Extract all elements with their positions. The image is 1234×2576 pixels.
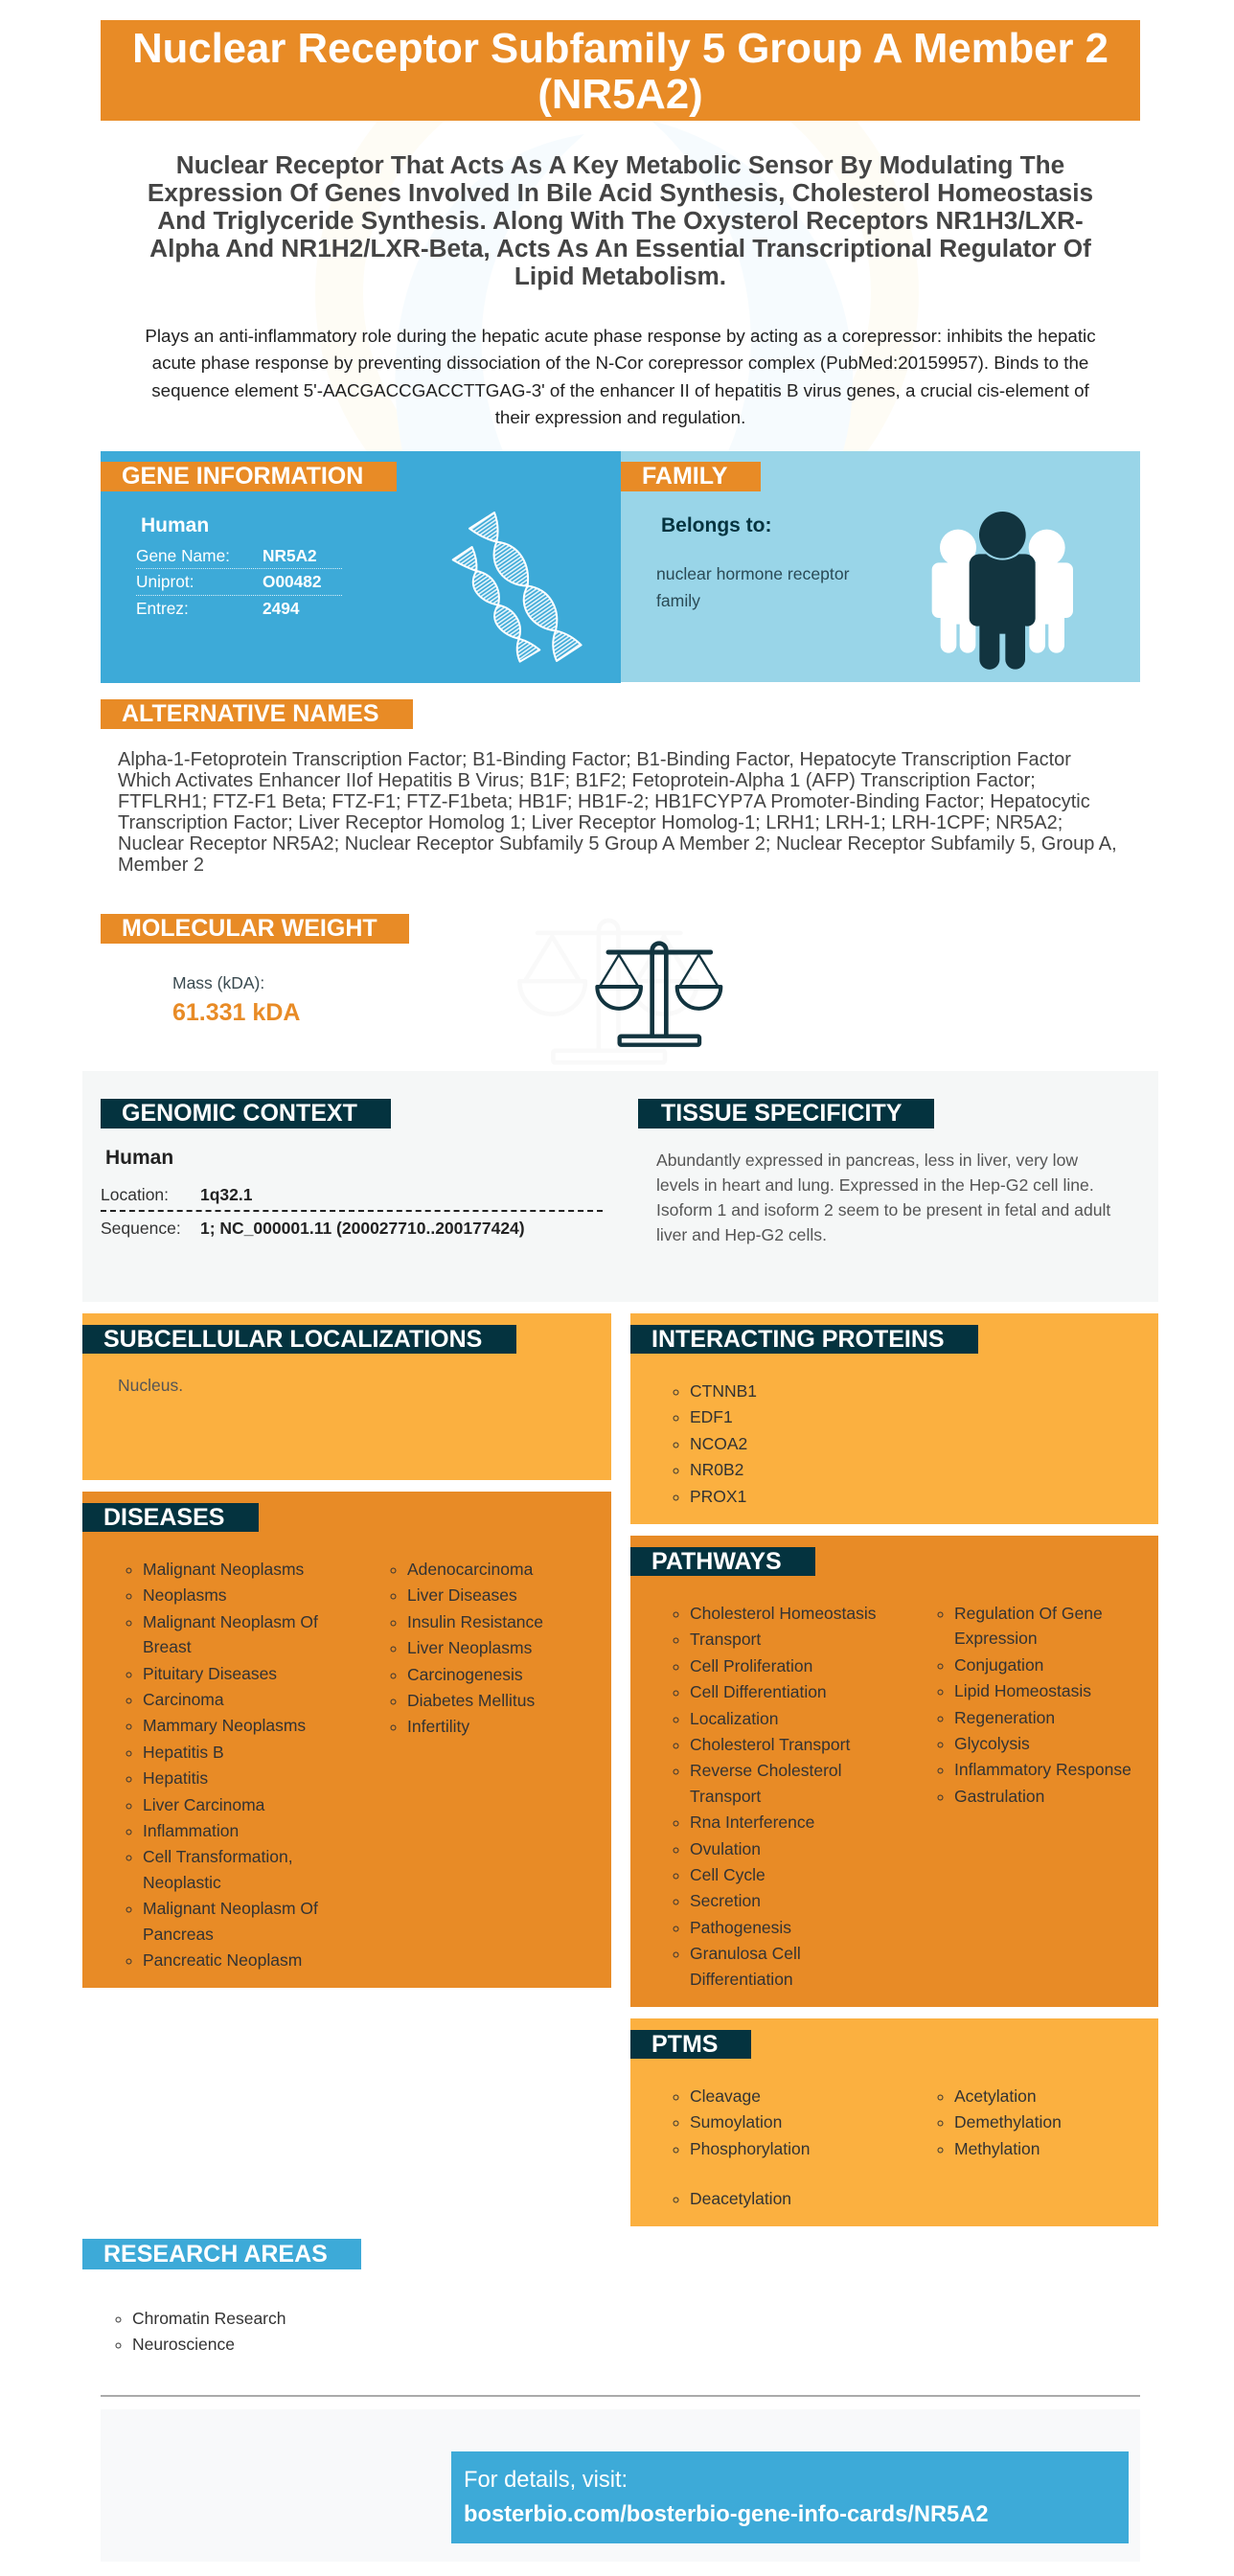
disease list column 1: Pituitary Diseases [143, 1664, 277, 1683]
title banner [101, 20, 1140, 121]
disease list column 1: Malignant Neoplasm Of [143, 1612, 318, 1631]
disease list column 2: Infertility [407, 1717, 469, 1736]
PTM list column 1: Cleavage [690, 2086, 761, 2106]
disease list column 2: Carcinogenesis [407, 1665, 523, 1684]
disease list column 2: Liver Diseases [407, 1585, 517, 1605]
PTM list column 1: Sumoylation [690, 2112, 782, 2131]
pathway list column 1: Reverse Cholesterol [690, 1761, 842, 1780]
pathway list column 2: Regulation Of Gene [954, 1604, 1103, 1623]
pathway list column 2: Inflammatory Response [954, 1760, 1131, 1779]
disease list column 1: Cell Transformation, [143, 1847, 293, 1866]
disease list column 1: Mammary Neoplasms [143, 1716, 306, 1735]
heading: alternative names: ALTERNATIVE NAMES [122, 700, 379, 727]
protein list: EDF1 [690, 1407, 733, 1426]
disease list column 1: Liver Carcinoma [143, 1795, 264, 1814]
heading: PTMs: PTMS [651, 2031, 718, 2058]
subtitle summary: Lipid Metabolism. [514, 262, 726, 290]
protein list: CTNNB1 [690, 1381, 757, 1401]
pathway list column 2: Glycolysis [954, 1734, 1030, 1753]
alternative names text: Alpha-1-Fetoprotein Transcription Factor; B1-Binding Factor; B1-Binding Factor, Hepatocyte Transcription Factor [118, 749, 1071, 770]
panel: gene information [101, 451, 621, 683]
panel: subcellular localizations [82, 1313, 611, 1480]
PTM list column 2: Demethylation [954, 2112, 1062, 2131]
family text [656, 564, 849, 609]
icon: DNA helix [452, 512, 583, 663]
heading: tissue specificity: TISSUE SPECIFICITY [661, 1100, 902, 1127]
PTM list column 2: Acetylation [954, 2086, 1037, 2106]
pathway list column 1: Secretion [690, 1891, 761, 1910]
footer panel [101, 2409, 1140, 2562]
subtitle summary: Alpha And NR1H2/LXR-Beta, Acts As An Essential Transcriptional Regulator Of [149, 234, 1091, 262]
family text: family [656, 590, 700, 609]
tissue specificity text: Isoform 1 and isoform 2 seem to be present in fetal and adult [656, 1200, 1110, 1220]
gene data rows: Gene Name: [136, 546, 230, 565]
pathway list column 1: Cholesterol Transport [690, 1735, 850, 1754]
research area list: Chromatin Research [132, 2309, 286, 2328]
disease list column 1: Pancreas [143, 1925, 214, 1944]
callout: details link [451, 2451, 1129, 2543]
alternative names text: Member 2 [118, 855, 204, 876]
disease list column 1: Malignant Neoplasms [143, 1560, 304, 1579]
icon: group of people [931, 512, 1073, 670]
description paragraph: acute phase response by preventing dissociation of the N-Cor corepressor complex (PubMed:20159957). Binds to the [152, 353, 1088, 373]
pathway list column 1: Rna Interference [690, 1812, 814, 1832]
tissue specificity text [656, 1151, 1111, 1244]
pathway list column 1: Transport [690, 1787, 761, 1806]
description paragraph: sequence element 5'-AACGACCGACCTTGAG-3' of the enhancer II of hepatitis B virus genes, a crucial cis-element of [151, 380, 1089, 400]
heading: family [621, 462, 761, 491]
species label: Human [141, 514, 209, 536]
protein list [673, 1381, 757, 1506]
pathway list column 1 [673, 1604, 877, 1989]
disease list column 2: Liver Neoplasms [407, 1638, 532, 1657]
PTM list column 2: Methylation [954, 2139, 1040, 2158]
family text: nuclear hormone receptor [656, 564, 849, 583]
heading: pathways [630, 1547, 815, 1576]
heading: family: FAMILY [642, 463, 727, 490]
gene data rows: 2494 [263, 599, 299, 618]
pathway list column 1: Cell Cycle [690, 1865, 766, 1884]
gene data rows: Entrez: [136, 599, 189, 618]
pathway list column 2 [937, 1604, 1131, 1806]
mass label: Mass (kDA): [172, 973, 264, 992]
research area list [115, 2309, 286, 2354]
location value: 1q32.1 [200, 1185, 252, 1204]
pathway list column 2: Regeneration [954, 1708, 1055, 1727]
heading: diseases: DISEASES [103, 1504, 224, 1531]
callout: details link: For details, visit: [464, 2468, 628, 2493]
PTM list column 1 [673, 2086, 811, 2208]
pathway list column 1: Cell Differentiation [690, 1682, 827, 1701]
heading: genomic context: GENOMIC CONTEXT [122, 1100, 357, 1127]
panel: interacting proteins [630, 1313, 1158, 1524]
section: alternative names [101, 699, 1117, 876]
PTM list column 1: Deacetylation [690, 2189, 791, 2208]
alternative names text [118, 749, 1117, 876]
disease list column 1: Hepatitis B [143, 1743, 224, 1762]
disease list column 1: Carcinoma [143, 1690, 224, 1709]
section: molecular weight [101, 914, 409, 1026]
disease list column 1: Breast [143, 1637, 192, 1656]
disease list column 1: Hepatitis [143, 1768, 208, 1788]
disease list column 2: Insulin Resistance [407, 1612, 543, 1631]
pathway list column 2: Expression [954, 1629, 1038, 1648]
icon: balance scale [595, 941, 722, 1047]
title banner: Nuclear Receptor Subfamily 5 Group A Member 2 [132, 25, 1108, 72]
subtitle summary: Expression Of Genes Involved In Bile Acid Synthesis, Cholesterol Homeostasis [148, 178, 1093, 207]
tissue specificity text: liver and Hep-G2 cells. [656, 1225, 827, 1244]
heading: interacting proteins: INTERACTING PROTEINS [651, 1326, 945, 1353]
gene data rows: O00482 [263, 572, 322, 591]
pathway list column 1: Cholesterol Homeostasis [690, 1604, 877, 1623]
protein list: PROX1 [690, 1487, 746, 1506]
alternative names text: Nuclear Receptor NR5A2; Nuclear Receptor Subfamily 5 Group A Member 2; Nuclear Receptor Subfamily 5, Group A, [118, 833, 1117, 855]
description paragraph: Plays an anti-inflammatory role during the hepatic acute phase response by acting as a corepressor: inhibits the hepatic [145, 326, 1096, 346]
subtitle summary: And Triglyceride Synthesis. Along With The Oxysterol Receptors NR1H3/LXR- [157, 206, 1084, 235]
disease list column 1: Neoplastic [143, 1873, 221, 1892]
gene data rows [136, 546, 342, 618]
panel: family [621, 451, 1140, 682]
tissue specificity text: Abundantly expressed in pancreas, less in liver, very low [656, 1151, 1078, 1170]
heading: research areas: RESEARCH AREAS [103, 2241, 328, 2268]
disease list column 2: Adenocarcinoma [407, 1560, 533, 1579]
pathway list column 1: Localization [690, 1709, 778, 1728]
gene data rows: Uniprot: [136, 572, 194, 591]
PTM list column 1: Phosphorylation [690, 2139, 811, 2158]
description paragraph: their expression and regulation. [495, 407, 745, 427]
heading: diseases [82, 1503, 259, 1532]
protein list: NCOA2 [690, 1434, 747, 1453]
disease list column 1: Inflammation [143, 1821, 239, 1840]
sequence value: 1; NC_000001.11 (200027710..200177424) [200, 1219, 525, 1238]
pathway list column 1: Pathogenesis [690, 1918, 791, 1937]
mass value: 61.331 kDA [172, 999, 300, 1026]
PTM list column 2 [937, 2086, 1062, 2158]
callout: details link: bosterbio.com/bosterbio-gene-info-cards/NR5A2 [464, 2502, 989, 2527]
pathway list column 1: Granulosa Cell [690, 1944, 801, 1963]
tissue specificity text: levels in heart and lung. Expressed in the Hep-G2 cell line. [656, 1175, 1094, 1195]
alternative names text: Which Activates Enhancer IIof Hepatitis B Virus; B1F; B1F2; Fetoprotein-Alpha 1 (AFP) Transcription Factor; [118, 770, 1036, 791]
heading: gene information: GENE INFORMATION [122, 463, 363, 490]
panel: genomic context and tissue specificity [82, 1071, 1158, 1302]
pathway list column 2: Conjugation [954, 1655, 1043, 1675]
pathway list column 1: Cell Proliferation [690, 1656, 812, 1676]
heading: PTMs [630, 2030, 751, 2059]
panel: pathways [630, 1536, 1158, 2007]
research area list: Neuroscience [132, 2335, 235, 2354]
sequence label: Sequence: [101, 1219, 181, 1238]
pathway list column 1: Differentiation [690, 1970, 793, 1989]
disease list column 2 [391, 1560, 543, 1736]
pathway list column 2: Gastrulation [954, 1787, 1044, 1806]
disease list column 1: Malignant Neoplasm Of [143, 1899, 318, 1918]
alternative names text: FTFLRH1; FTZ-F1 Beta; FTZ-F1; FTZ-F1beta; HB1F; HB1F-2; HB1FCYP7A Promoter-Binding Factor; Hepatocytic [118, 791, 1090, 812]
description paragraph [145, 326, 1096, 427]
heading: pathways: PATHWAYS [651, 1548, 782, 1575]
alternative names text: Transcription Factor; Liver Receptor Homolog 1; Liver Receptor Homolog-1; LRH1; LRH-1; LRH-1CPF; NR5A2; [118, 812, 1063, 833]
heading: subcellular localizations: SUBCELLULAR LOCALIZATIONS [103, 1326, 482, 1353]
belongs-to label: Belongs to: [661, 514, 772, 536]
disease list column 1: Pancreatic Neoplasm [143, 1950, 302, 1970]
species label: Human [105, 1147, 173, 1169]
subtitle summary: Nuclear Receptor That Acts As A Key Metabolic Sensor By Modulating The [176, 150, 1064, 179]
title banner: (NR5A2) [537, 71, 703, 118]
pathway list column 1: Transport [690, 1630, 761, 1649]
background watermark logo [315, 121, 919, 451]
pathway list column 1: Ovulation [690, 1839, 761, 1858]
pathway list column 2: Lipid Homeostasis [954, 1681, 1091, 1700]
localization text: Nucleus. [118, 1376, 183, 1395]
subtitle summary [148, 150, 1093, 290]
gene data rows: NR5A2 [263, 546, 317, 565]
panel: diseases [82, 1492, 611, 1988]
heading: molecular weight: MOLECULAR WEIGHT [122, 915, 377, 942]
panel: PTMs [630, 2018, 1158, 2226]
protein list: NR0B2 [690, 1460, 743, 1479]
disease list column 2: Diabetes Mellitus [407, 1691, 535, 1710]
disease list column 1: Neoplasms [143, 1585, 227, 1605]
location label: Location: [101, 1185, 169, 1204]
section: research areas [82, 2239, 361, 2354]
disease list column 1 [126, 1560, 318, 1970]
